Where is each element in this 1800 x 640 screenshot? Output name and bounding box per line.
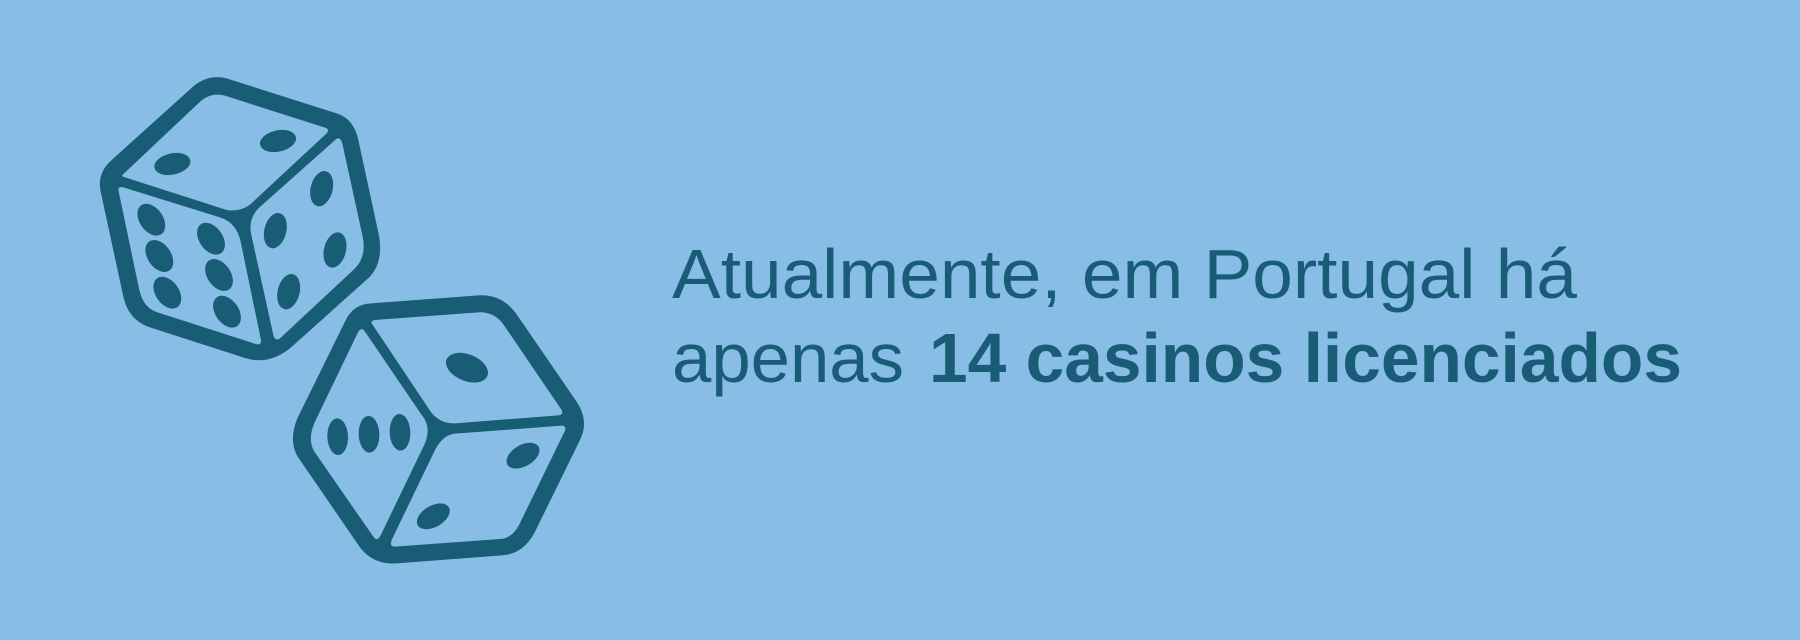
- text: first line: Atualmente, em Portugal há: [672, 235, 1577, 313]
- icon: upper die: [100, 77, 380, 360]
- headline text: [672, 235, 1682, 397]
- icon: dice pair: [100, 77, 584, 563]
- icon: lower die: [293, 295, 584, 563]
- text: second line regular: apenas: [672, 319, 904, 397]
- text: second line bold: 14 casinos licenciados: [929, 319, 1682, 397]
